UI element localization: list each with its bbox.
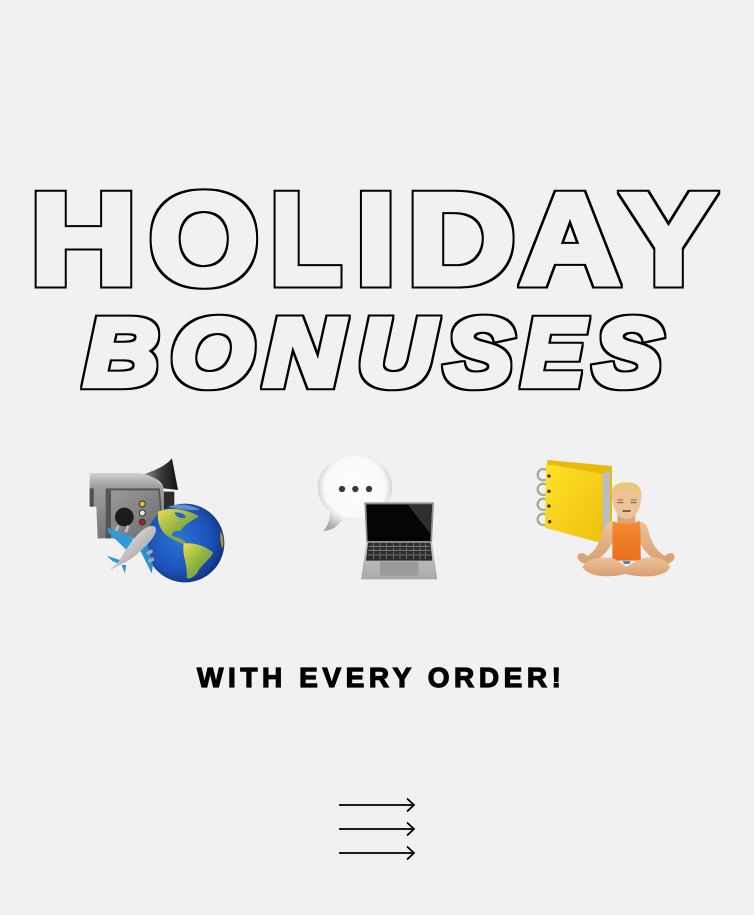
heading: BONUSES: E [522, 300, 586, 406]
heading: BONUSES: N [264, 300, 345, 406]
arrow 1 [339, 798, 414, 812]
heading: BONUSES: U [358, 300, 437, 406]
arrow 2 [339, 822, 414, 836]
icon group: notebook and meditating person [538, 460, 675, 576]
heading: BONUSES: S [446, 300, 512, 406]
heading: BONUSES: S [594, 300, 662, 406]
arrow 3 [339, 846, 414, 860]
icon: laptop [361, 502, 437, 579]
icon: video camera [90, 458, 178, 538]
icon group: video camera, airplane and globe [90, 458, 224, 582]
icon: meditating person [577, 482, 675, 576]
arrows [339, 798, 414, 860]
icon: globe [146, 504, 224, 582]
heading: HOLIDAY: L [270, 168, 341, 312]
heading: HOLIDAY: A [520, 168, 620, 312]
heading: HOLIDAY: O [149, 168, 259, 312]
icon: airplane [107, 526, 156, 574]
tagline: WITH EVERY ORDER! [197, 662, 561, 693]
icon: notebook [538, 460, 612, 543]
heading: BONUSES: O [171, 300, 253, 406]
heading: HOLIDAY: D [407, 168, 515, 312]
heading: HOLIDAY: H [30, 168, 137, 312]
heading: HOLIDAY: Y [622, 168, 715, 312]
heading: HOLIDAY: I [356, 168, 396, 312]
icon group: speech bubble and laptop [318, 456, 437, 579]
icon: speech bubble [318, 456, 392, 531]
heading: BONUSES: B [84, 300, 158, 406]
